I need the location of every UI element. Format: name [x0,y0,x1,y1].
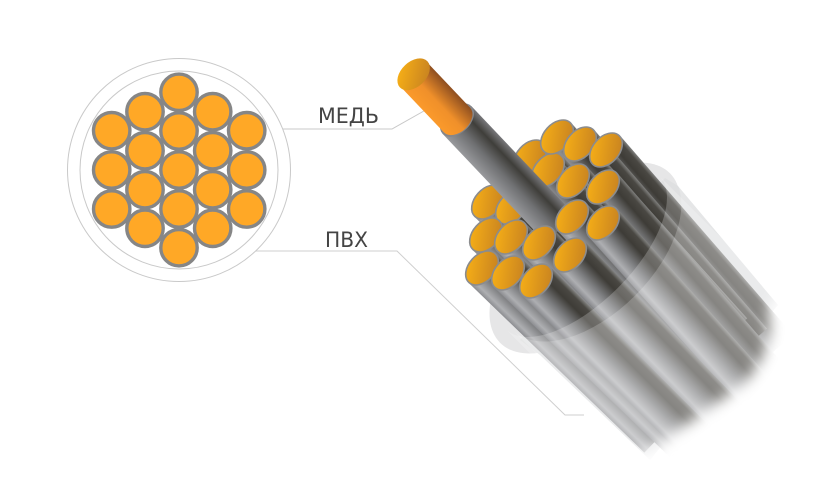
outer insulation ring [68,58,290,282]
insulation back end [490,162,678,354]
inner insulation ring [80,71,278,269]
strand end faces [464,119,623,299]
leader line: ПВХ [255,251,584,415]
cable illustration [397,58,780,454]
insulation sleeve back band [538,186,776,454]
bare copper conductor [401,62,470,132]
label: МЕДЬ: МЕДЬ [318,104,379,128]
copper end face [397,58,430,90]
leader line: МЕДЬ [250,107,431,129]
rear strands [470,124,780,398]
translucent insulation sleeve outer [526,206,774,452]
cross-section diagram [68,58,290,282]
label: ПВХ: ПВХ [325,228,368,252]
copper strands cross-section [94,74,265,266]
translucent insulation sleeve inner [524,188,774,452]
insulated part [442,106,564,232]
front strands [470,222,732,452]
central wire with stripped copper tip [397,58,564,232]
